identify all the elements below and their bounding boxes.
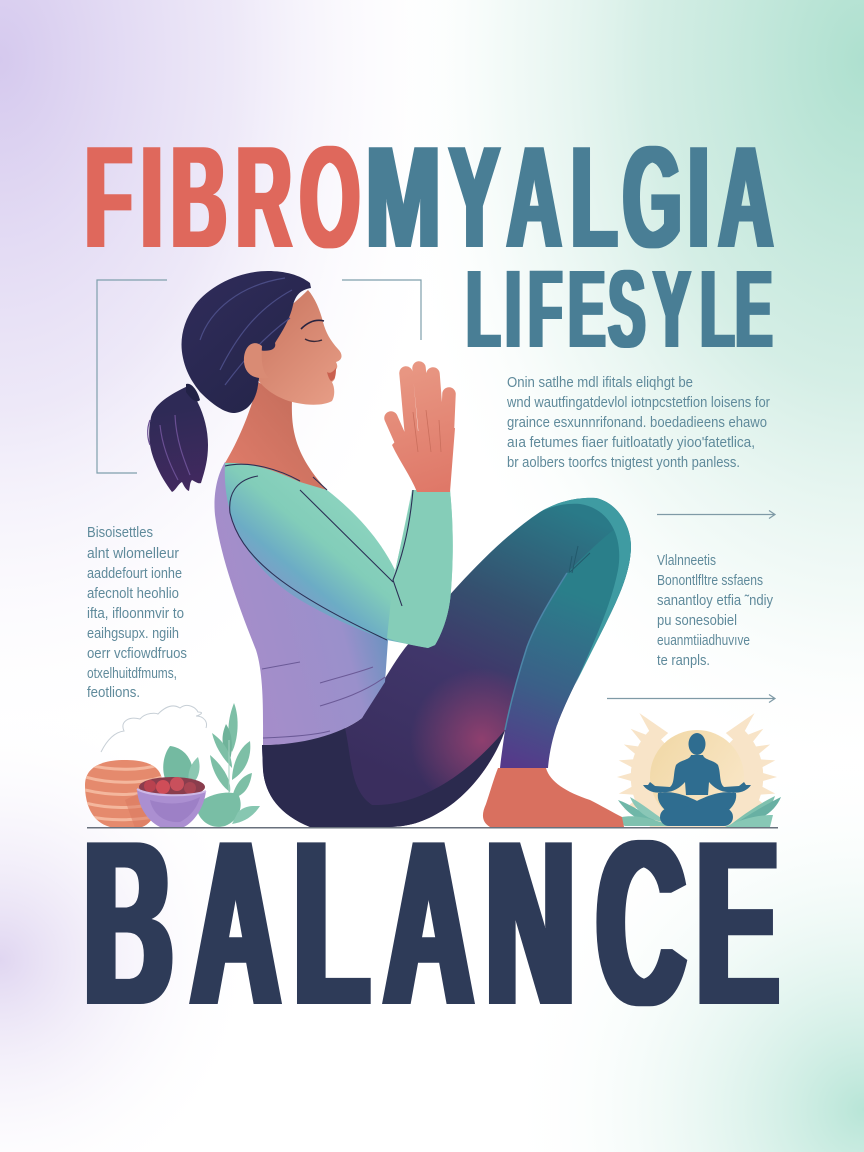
text block: left: afecnolt heohlio — [87, 585, 179, 602]
text block: left: otxelhuitdfmums, — [87, 665, 177, 682]
subtitle: Lifesyle: LIFESYLE — [467, 248, 772, 371]
ear — [244, 343, 269, 378]
text block: left: feotlions. — [87, 684, 140, 701]
text block: upper right: graince esxunnrifonand. boedadieens ehawo — [507, 414, 767, 431]
ground line — [87, 827, 778, 828]
text block: upper right: br aolbers toorfcs tnigtest yonth panless. — [507, 454, 740, 471]
text block: left: ifta, ifloonmvir to — [87, 605, 184, 622]
hand — [391, 368, 455, 492]
title: Fibromyalgia — [85, 116, 773, 278]
seated silhouette — [643, 733, 751, 826]
thigh and hip — [262, 498, 631, 827]
dark hip shading — [262, 728, 505, 827]
text block: left: alnt wlomelleur — [87, 545, 179, 562]
text block: right — [657, 552, 773, 669]
title: Balance: BALANCE — [84, 791, 778, 1054]
text block: upper right — [506, 374, 770, 471]
text block: left: aaddefourt ionhe — [87, 565, 182, 582]
corner bracket: right — [342, 280, 421, 340]
hair — [182, 271, 311, 413]
thigh highlight — [418, 676, 515, 787]
basil leaves — [163, 746, 194, 785]
text block: left: eaihgsupx. ngiih — [87, 625, 179, 642]
eyebrow — [301, 320, 324, 329]
shin crease highlight — [505, 573, 567, 730]
text block: upper right: Onin satlhe mdl ifitals eliqhgt be — [507, 374, 693, 391]
hair strands — [200, 278, 292, 385]
forearm — [387, 490, 453, 648]
herb sprig — [210, 703, 252, 798]
face — [253, 290, 342, 405]
ponytail strands — [148, 415, 190, 480]
shirt torso — [214, 462, 388, 745]
title: Fibromyalgia: YALGIA — [449, 117, 773, 278]
corner bracket: left — [97, 280, 167, 473]
text block: upper right: aıa fetumes fiaer fuitloatatly yioo'fatetlica, — [507, 434, 755, 451]
purple bowl with berries — [137, 777, 206, 827]
text block: right: Bonontlfltre ssfaens — [657, 572, 763, 589]
icon: food and plants — [85, 703, 260, 828]
text block: upper right: wnd wautfingatdevlol iotnpcstetfion loisens for — [506, 394, 770, 411]
text block: right: Vlalnneetis — [657, 552, 716, 569]
arrow: lower right — [607, 694, 775, 702]
text block: right: sanantloy etfia ˜ndiy — [657, 592, 773, 609]
text block: left — [87, 524, 187, 701]
shirt wrinkles — [262, 662, 385, 738]
lips — [327, 368, 336, 381]
title: Fibromyalgia: FIBRO — [85, 116, 360, 278]
arrow: upper right — [657, 510, 775, 518]
striped fruit — [85, 760, 165, 828]
foot — [483, 768, 624, 827]
text block: left: Bisoisettles — [87, 524, 153, 541]
sun disc — [650, 730, 744, 824]
text block: right: euanmtiiadhuvıve — [657, 632, 750, 649]
figure: woman in seated pose — [148, 271, 631, 830]
title: Fibromyalgia: M — [366, 116, 441, 278]
sleeve upper arm — [225, 463, 453, 648]
hair tie — [186, 384, 200, 401]
ponytail — [149, 385, 208, 492]
large leaf — [196, 793, 241, 827]
sleeve outline strokes — [225, 464, 413, 640]
icon: meditation figure with sun — [612, 708, 781, 827]
knee rim — [540, 498, 631, 685]
knee crease — [569, 546, 590, 573]
neck — [225, 382, 327, 490]
leaves under figure — [612, 796, 781, 827]
text block: right: te ranpls. — [657, 652, 710, 669]
sun rays — [617, 708, 777, 827]
text block: left: oerr vcfiowdfruos — [87, 645, 187, 662]
steam cloud outline — [101, 705, 207, 752]
shin — [500, 525, 631, 768]
text block: right: pu sonesobiel — [657, 612, 737, 629]
closed eye — [305, 339, 322, 341]
